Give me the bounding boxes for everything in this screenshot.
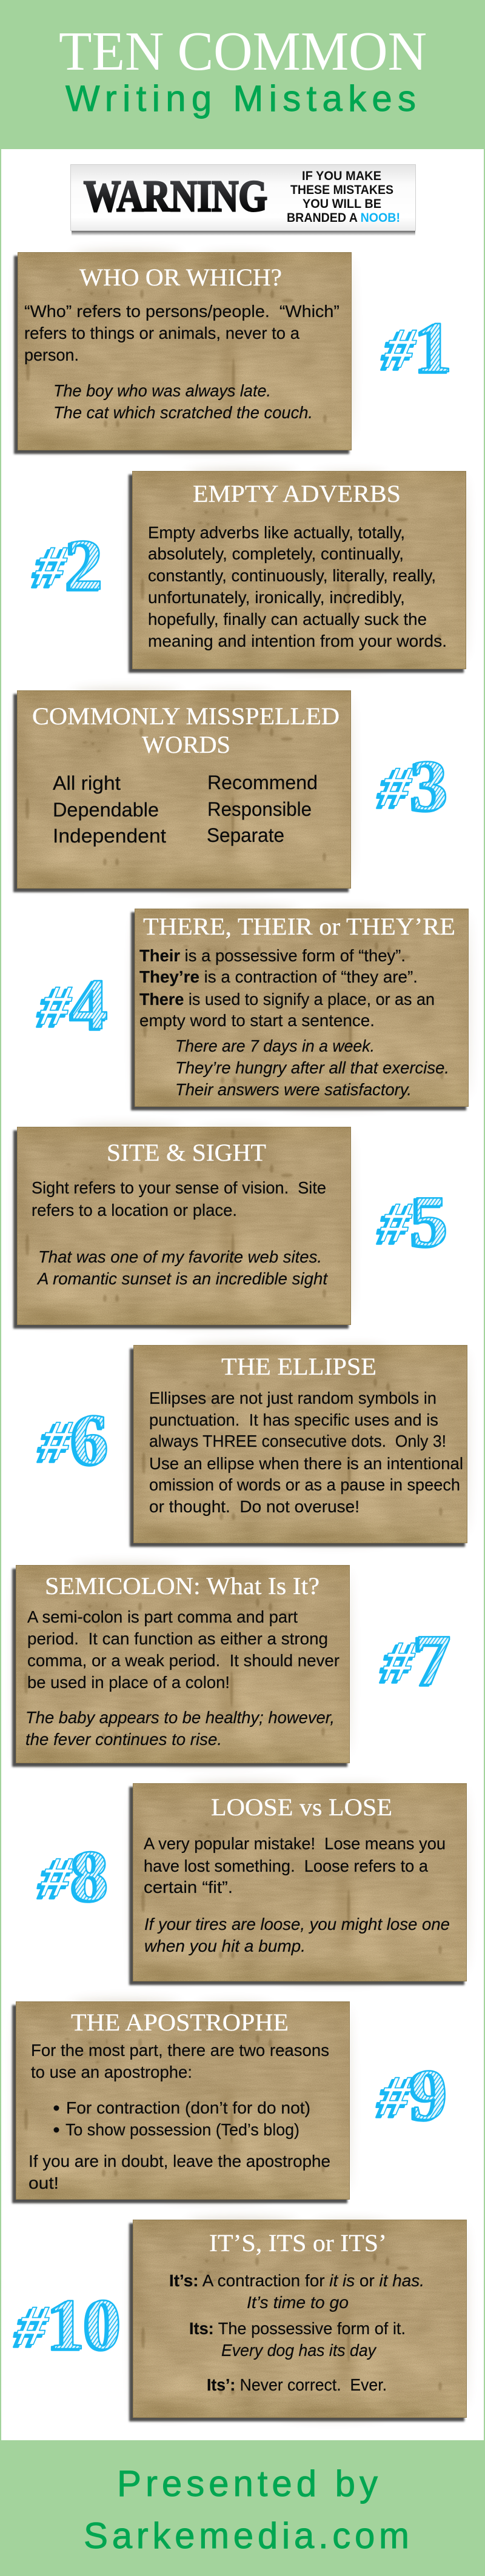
explanation: punctuation. It has specific uses and is bbox=[149, 1410, 438, 1429]
examples: There are 7 days in a week. bbox=[175, 1036, 375, 1055]
explanation: refers to things or animals, never to a bbox=[24, 324, 299, 342]
number badge: #2: # bbox=[27, 539, 70, 599]
explanation bbox=[149, 1389, 463, 1516]
examples bbox=[175, 1036, 449, 1099]
definition: its: Its: The possessive form of it. bbox=[189, 2319, 406, 2338]
panel: site and sight bbox=[13, 1126, 351, 1329]
warning banner bbox=[70, 165, 416, 236]
explanation: Their is a possessive form of “they”. bbox=[139, 946, 406, 965]
examples bbox=[53, 381, 313, 422]
explanation: They’re is a contraction of “they are”. bbox=[139, 967, 418, 986]
word list right: Recommend bbox=[207, 772, 318, 793]
heading: IT’S, ITS or ITS’ bbox=[209, 2229, 387, 2257]
definition: it's: It’s: A contraction for it is or it has. bbox=[169, 2271, 424, 2290]
examples bbox=[25, 1708, 335, 1749]
number badge: #9: # bbox=[374, 2066, 417, 2127]
number badge: #8 bbox=[32, 1835, 109, 1917]
explanation: or thought. Do not overuse! bbox=[149, 1497, 360, 1516]
definition: its': Its’: Never correct. Ever. bbox=[207, 2375, 387, 2394]
number badge: #5: 5 bbox=[412, 1181, 448, 1261]
number badge: #3: # bbox=[372, 759, 415, 820]
explanation: empty word to start a sentence. bbox=[139, 1011, 375, 1030]
number badge: #5: # bbox=[372, 1195, 415, 1256]
number badge: #6 bbox=[32, 1399, 109, 1481]
footer text: presented by: Presented by bbox=[117, 2463, 378, 2504]
number badge: #6: # bbox=[35, 1411, 78, 1472]
explanation bbox=[32, 1178, 326, 1220]
bullet list: For contraction (don’t for do not) bbox=[66, 2098, 310, 2117]
number badge: #7: 7 bbox=[415, 1620, 451, 1700]
explanation: A very popular mistake! Lose means you bbox=[144, 1834, 446, 1853]
panel: loose vs lose bbox=[129, 1782, 467, 1985]
footer banner bbox=[0, 2440, 485, 2576]
word list left: Dependable bbox=[53, 799, 159, 821]
explanation: hopefully, finally can actually suck the bbox=[148, 610, 427, 629]
explanation: person. bbox=[24, 345, 79, 364]
introduction: to use an apostrophe: bbox=[31, 2063, 192, 2081]
explanation bbox=[144, 1834, 446, 1897]
number badge: #10: # bbox=[12, 2296, 55, 2357]
explanation: comma, or a weak period. It should never bbox=[27, 1651, 340, 1670]
panel: the ellipse bbox=[130, 1344, 467, 1547]
number badge: #8: # bbox=[35, 1847, 78, 1908]
definition: it's bbox=[169, 2271, 424, 2312]
number badge: #2: 2 bbox=[64, 526, 101, 606]
number badge: #5 bbox=[372, 1181, 448, 1263]
number badge: #8: 8 bbox=[72, 1835, 109, 1916]
bullet list: To show possession (Ted’s blog) bbox=[65, 2120, 299, 2139]
heading: SEMICOLON: What Is It? bbox=[45, 1572, 319, 1600]
word list right: Responsible bbox=[207, 798, 312, 820]
explanation: meaning and intention from your words. bbox=[148, 632, 447, 650]
number badge: #10: 10 bbox=[48, 2284, 121, 2364]
examples bbox=[144, 1915, 450, 1955]
warning message: BRANDED A NOOB! bbox=[287, 210, 400, 225]
panel: who or which bbox=[14, 251, 352, 454]
word list right bbox=[207, 772, 318, 846]
number badge: #3: # bbox=[375, 757, 418, 818]
explanation: have lost something. Loose refers to a bbox=[144, 1857, 428, 1875]
explanation bbox=[148, 523, 447, 650]
heading: SITE & SIGHT bbox=[107, 1139, 266, 1166]
panel: there their or they're bbox=[131, 907, 469, 1110]
number badge: #7: # bbox=[375, 1634, 418, 1695]
closing advice: If you are in doubt, leave the apostrophe bbox=[28, 2152, 330, 2171]
examples: A romantic sunset is an incredible sight bbox=[36, 1269, 328, 1288]
examples: the fever continues to rise. bbox=[25, 1730, 222, 1749]
explanation: certain “fit”. bbox=[144, 1878, 233, 1897]
explanation: Empty adverbs like actually, totally, bbox=[148, 523, 405, 542]
number badge: #10 bbox=[8, 2284, 121, 2366]
bullet list bbox=[53, 2098, 310, 2139]
examples: when you hit a bump. bbox=[144, 1937, 306, 1955]
heading: WORDS bbox=[142, 731, 230, 758]
explanation bbox=[139, 946, 435, 1030]
number badge: #1: # bbox=[376, 321, 419, 382]
title: ten common: TEN COMMON bbox=[59, 21, 427, 82]
explanation: Ellipses are not just random symbols in bbox=[149, 1389, 436, 1407]
panel: commonly misspelled words bbox=[13, 689, 351, 892]
number badge: #7 bbox=[375, 1620, 451, 1701]
introduction: For the most part, there are two reasons bbox=[31, 2041, 329, 2060]
definition: its bbox=[189, 2319, 406, 2360]
heading: THE APOSTROPHE bbox=[71, 2009, 289, 2036]
number badge: #1: # bbox=[379, 319, 422, 379]
number badge: #2 bbox=[27, 524, 103, 606]
number badge: #2: # bbox=[30, 536, 73, 597]
explanation bbox=[24, 302, 340, 364]
left page border bbox=[0, 0, 1, 2576]
closing advice bbox=[28, 2152, 330, 2192]
heading: LOOSE vs LOSE bbox=[211, 1794, 392, 1821]
heading: EMPTY ADVERBS bbox=[193, 480, 401, 507]
number badge: #10: 10 bbox=[46, 2285, 119, 2366]
subtitle: writing mistakes: Writing Mistakes bbox=[65, 78, 416, 119]
explanation: Sight refers to your sense of vision. Site bbox=[32, 1178, 326, 1197]
number badge: #4: 4 bbox=[69, 965, 105, 1046]
panel: the apostrophe bbox=[12, 2000, 350, 2203]
number badge: #2: 2 bbox=[67, 524, 103, 605]
introduction bbox=[31, 2041, 329, 2081]
word list left: All right bbox=[53, 772, 121, 794]
warning message bbox=[287, 169, 400, 225]
explanation: period. It can function as either a strong bbox=[27, 1629, 328, 1648]
number badge: #7: 7 bbox=[412, 1621, 449, 1701]
number badge: #9: 9 bbox=[411, 2054, 447, 2135]
number badge: #4: # bbox=[35, 976, 78, 1036]
explanation bbox=[27, 1607, 340, 1692]
number badge: #4: 4 bbox=[72, 964, 108, 1044]
number badge: #6: 6 bbox=[72, 1399, 109, 1480]
number badge: #5: # bbox=[375, 1193, 418, 1253]
explanation: “Who” refers to persons/people. “Which” bbox=[24, 302, 340, 321]
examples: The cat which scratched the couch. bbox=[53, 403, 313, 422]
number badge: #10: # bbox=[8, 2298, 52, 2359]
warning message: IF YOU MAKE bbox=[302, 169, 381, 183]
warning message: THESE MISTAKES bbox=[290, 182, 393, 197]
right page border bbox=[484, 0, 485, 2576]
explanation: Use an ellipse when there is an intentional bbox=[149, 1454, 463, 1473]
explanation: absolutely, completely, continually, bbox=[148, 544, 404, 563]
examples: They’re hungry after all that exercise. bbox=[175, 1058, 449, 1077]
heading bbox=[32, 702, 340, 758]
number badge: #5: 5 bbox=[409, 1182, 446, 1263]
examples: The baby appears to be healthy; however, bbox=[25, 1708, 335, 1727]
warning word: WARNING bbox=[84, 172, 267, 221]
panel: semicolon bbox=[12, 1564, 350, 1767]
number badge: #6: # bbox=[32, 1413, 75, 1474]
examples: That was one of my favorite web sites. bbox=[38, 1247, 322, 1266]
heading: THE ELLIPSE bbox=[221, 1353, 376, 1380]
word list left: Independent bbox=[53, 825, 166, 847]
examples: Their answers were satisfactory. bbox=[175, 1080, 412, 1099]
number badge: #1: 1 bbox=[416, 307, 452, 387]
number badge: #9: 9 bbox=[409, 2055, 445, 2136]
heading: WHO OR WHICH? bbox=[79, 264, 282, 291]
number badge: #1 bbox=[376, 307, 452, 389]
explanation: There is used to signify a place, or as an bbox=[139, 990, 435, 1009]
explanation: be used in place of a colon! bbox=[27, 1673, 230, 1692]
explanation: unfortunately, ironically, incredibly, bbox=[148, 588, 405, 607]
explanation: A semi-colon is part comma and part bbox=[27, 1607, 298, 1626]
number badge: #8: 8 bbox=[70, 1837, 106, 1917]
number badge: #4 bbox=[32, 964, 108, 1046]
heading: COMMONLY MISSPELLED bbox=[32, 702, 340, 730]
number badge: #6: 6 bbox=[70, 1400, 106, 1481]
word list left bbox=[53, 772, 166, 847]
warning message: YOU WILL BE bbox=[303, 196, 381, 211]
number badge: #3: 3 bbox=[412, 745, 448, 826]
number badge: #9: # bbox=[371, 2069, 414, 2129]
number badge: #3 bbox=[372, 745, 448, 827]
header banner bbox=[0, 0, 485, 149]
number badge: #9 bbox=[371, 2054, 447, 2136]
panel: empty adverbs bbox=[129, 470, 466, 673]
number badge: #7: # bbox=[378, 1632, 421, 1692]
explanation: omission of words or as a pause in speech bbox=[149, 1475, 460, 1494]
footer text: sarkemedia.com: Sarkemedia.com bbox=[84, 2515, 409, 2556]
number badge: #1: 1 bbox=[413, 308, 450, 389]
examples bbox=[36, 1247, 328, 1288]
definition: its: Every dog has its day bbox=[221, 2341, 377, 2360]
examples: The boy who was always late. bbox=[53, 381, 271, 400]
explanation: refers to a location or place. bbox=[32, 1201, 237, 1220]
explanation: constantly, continuously, literally, really, bbox=[148, 566, 436, 585]
closing advice: out! bbox=[28, 2174, 59, 2192]
heading: THERE, THEIR or THEY’RE bbox=[143, 913, 455, 940]
explanation: always THREE consecutive dots. Only 3! bbox=[149, 1432, 446, 1450]
examples: If your tires are loose, you might lose one bbox=[144, 1915, 450, 1934]
number badge: #3: 3 bbox=[409, 746, 446, 827]
number badge: #4: # bbox=[32, 978, 75, 1039]
word list right: Separate bbox=[207, 824, 284, 846]
number badge: #8: # bbox=[32, 1850, 75, 1910]
panel: it's its or its' bbox=[129, 2218, 467, 2421]
definition: it's: It’s time to go bbox=[247, 2293, 349, 2312]
